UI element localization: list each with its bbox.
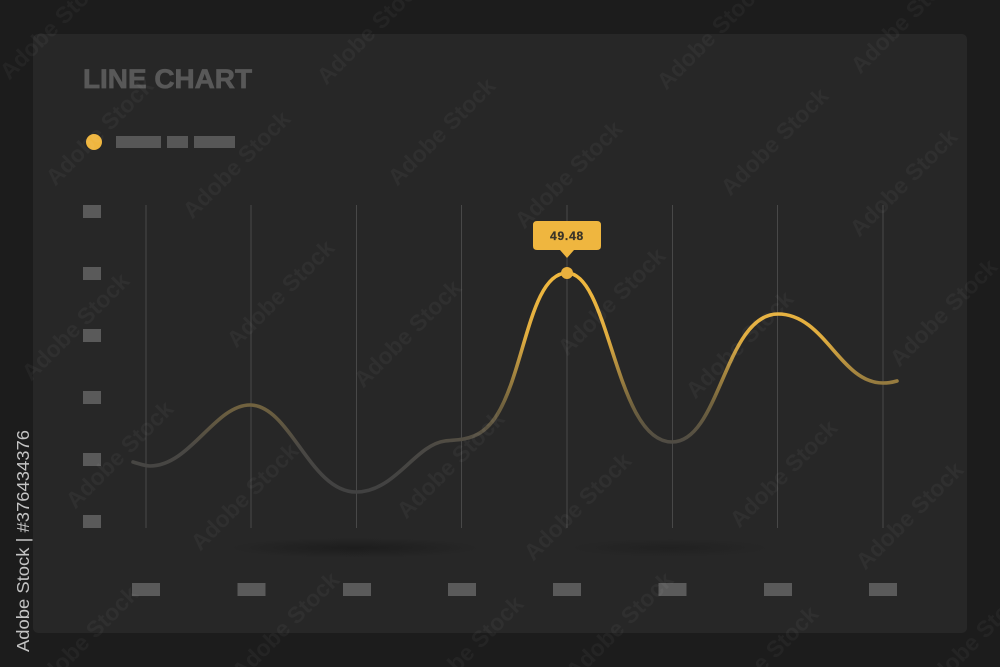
x axis placeholder labels [132, 583, 897, 596]
watermarks: Adobe Stock [715, 82, 833, 200]
watermarks: Adobe Stock [348, 274, 466, 392]
watermarks: Adobe Stock [850, 456, 968, 574]
legend [86, 134, 235, 150]
watermarks: Adobe Stock [509, 115, 627, 233]
watermarks: Adobe Stock [185, 437, 303, 555]
callout: peak value [533, 221, 601, 258]
watermarks: Adobe Stock [16, 267, 134, 385]
watermarks: Adobe Stock [177, 105, 295, 223]
watermarks: Adobe Stock [391, 405, 509, 523]
watermarks: Adobe Stock [382, 72, 500, 190]
watermarks: Adobe Stock [680, 285, 798, 403]
callout: peak value: 49.48 [550, 229, 584, 243]
ground shadows under curve [230, 538, 770, 558]
data line [133, 273, 897, 492]
watermarks: Adobe Stock [552, 242, 670, 360]
legend placeholder label [116, 136, 235, 148]
legend marker [86, 134, 102, 150]
title: LINE CHART [83, 64, 253, 94]
stock id side label: Adobe Stock | #376434376 [13, 430, 33, 652]
peak marker [561, 267, 573, 279]
watermarks: Adobe Stock [40, 72, 158, 190]
y axis placeholder labels [83, 205, 101, 528]
watermarks: Adobe Stock [221, 234, 339, 352]
watermarks: Adobe Stock [724, 414, 842, 532]
watermarks: Adobe Stock [844, 123, 962, 241]
watermarks: Adobe Stock [884, 253, 1000, 371]
watermarks: Adobe Stock [518, 447, 636, 565]
watermarks: Adobe Stock [60, 395, 178, 513]
vertical grid lines [146, 205, 883, 528]
